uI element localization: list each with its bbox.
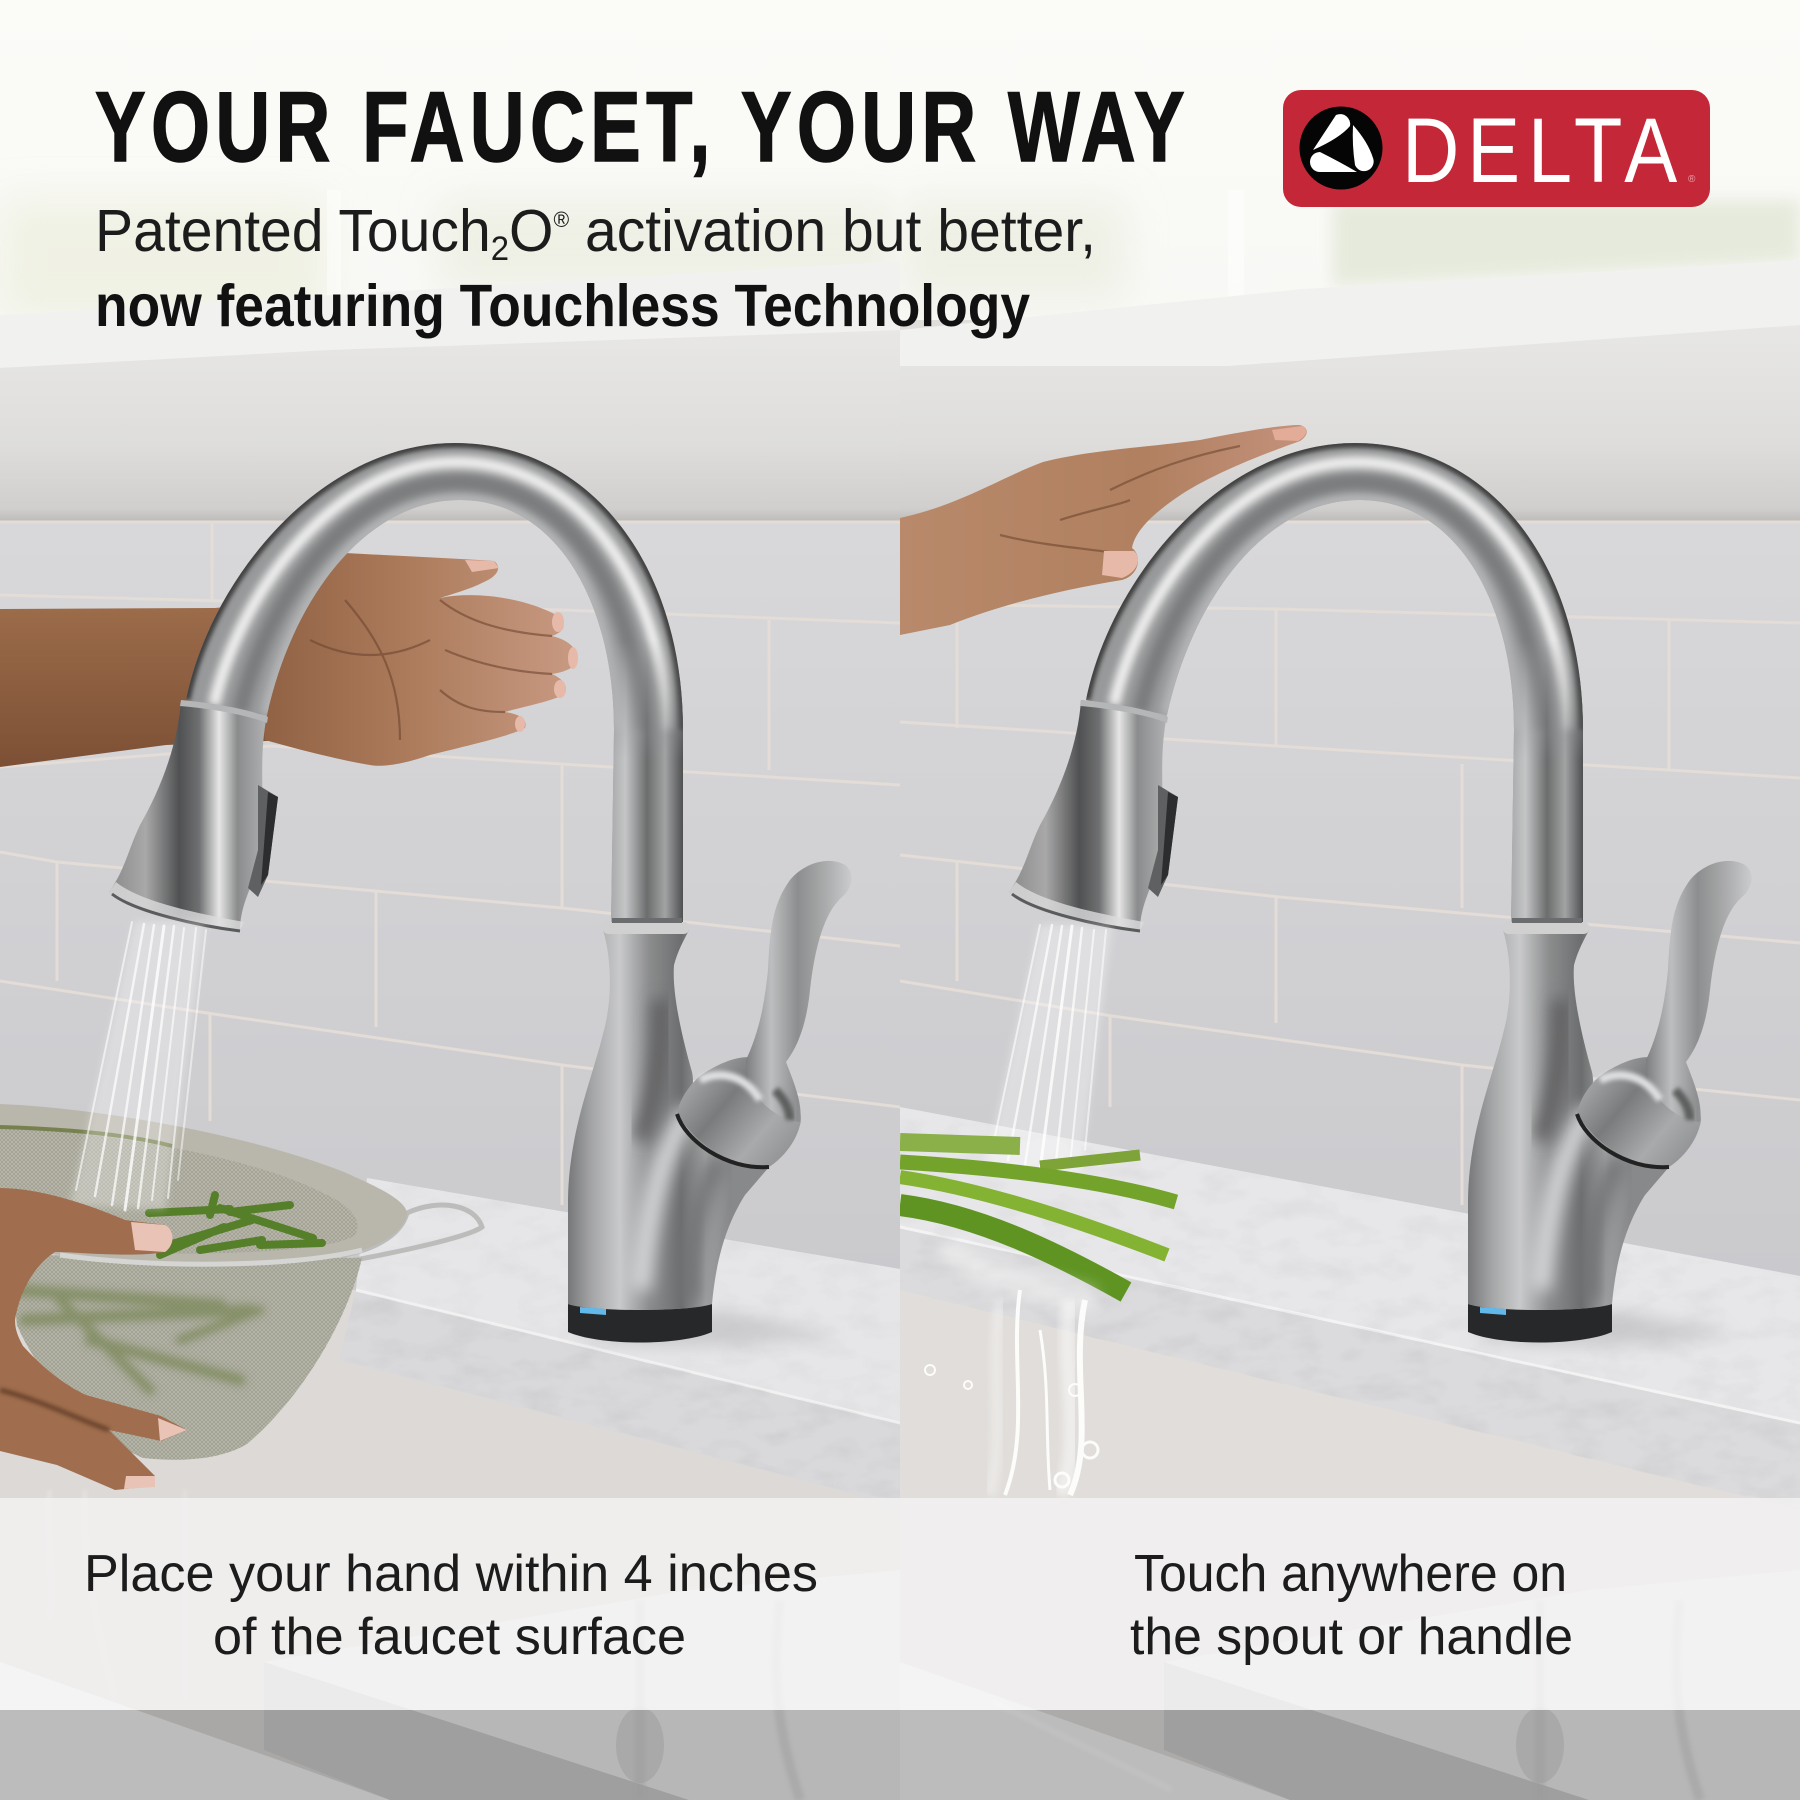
water splash: [925, 1245, 1098, 1495]
panel: left faucet scene: [0, 443, 852, 1490]
subtitle line 1: Patented Touch: [95, 198, 504, 264]
subtitle line 1: 2: [491, 230, 509, 268]
caption: right: Touch anywhere on: [1134, 1545, 1567, 1603]
faucet: [1009, 443, 1751, 1347]
faucet: [109, 443, 851, 1347]
green onions: [900, 1142, 1176, 1292]
logo: Delta: DELTA: [1402, 100, 1685, 202]
water spray: [985, 925, 1112, 1175]
panel: right faucet scene: [900, 425, 1751, 1495]
caption: right: [1130, 1545, 1573, 1666]
hand holding colander: [0, 1188, 187, 1490]
background scene: right panel: [900, 190, 1800, 1797]
bottom gray band: [0, 1710, 1800, 1800]
title: YOUR FAUCET, YOUR WAY: [95, 71, 1190, 182]
water spray: [70, 921, 206, 1210]
subtitle line 2: now featuring Touchless Technology: [95, 273, 1030, 339]
hand near faucet: [0, 553, 578, 767]
caption band background: [0, 1498, 1800, 1710]
caption: right: the spout or handle: [1130, 1608, 1573, 1666]
caption: left: Place your hand within 4 inches: [84, 1545, 818, 1603]
caption: left: of the faucet surface: [213, 1608, 686, 1666]
subtitle line 1: ®: [553, 207, 569, 232]
logo: Delta: ®: [1688, 174, 1696, 185]
background scene: left panel: [0, 208, 900, 1798]
hand touching spout: [900, 425, 1307, 635]
falling water drops: [49, 1490, 185, 1700]
caption: left: [84, 1545, 818, 1666]
subtitle line 1: O: [509, 198, 553, 264]
logo: Delta: [1283, 90, 1710, 207]
lower sink reflections: [0, 1570, 1800, 1800]
subtitle line 1: activation but better,: [569, 198, 1096, 264]
colander with green beans: [0, 1104, 482, 1460]
